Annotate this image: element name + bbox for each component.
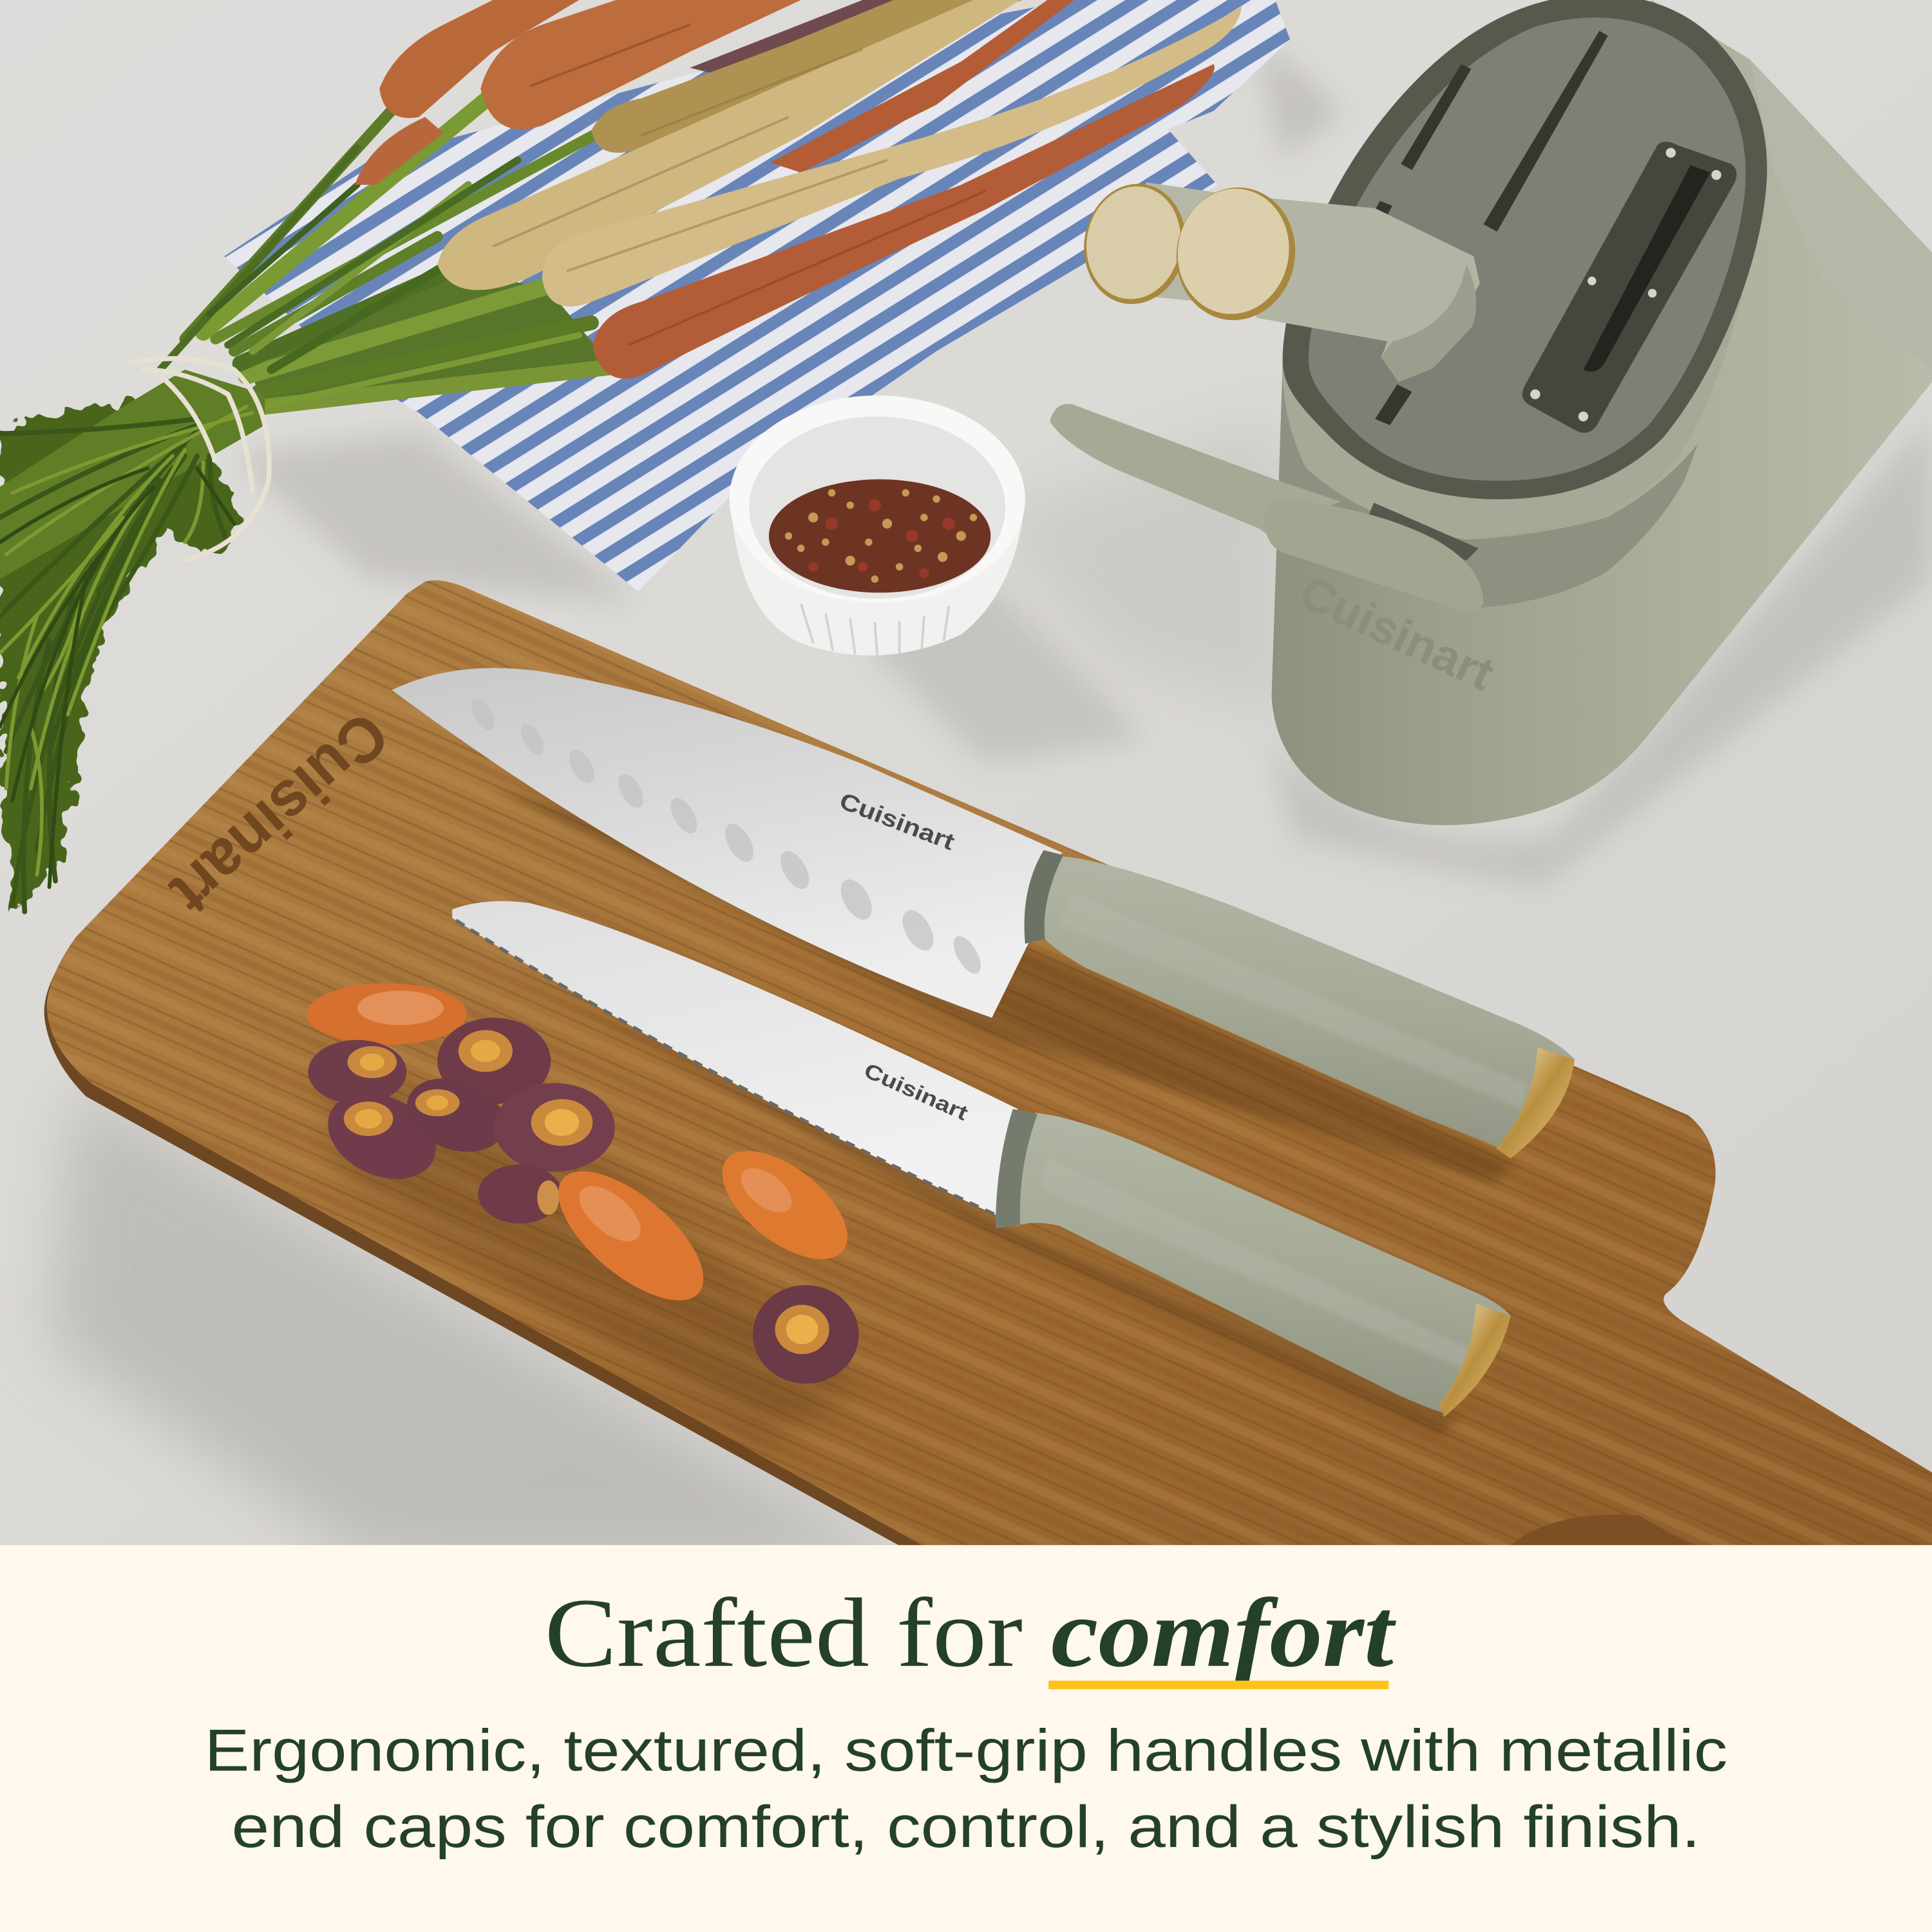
body line one: Ergonomic, textured, soft-grip handles with metallic (205, 1718, 1727, 1783)
shadows on counter (50, 37, 1343, 1565)
slot short (1401, 64, 1471, 170)
red pepper flakes (769, 479, 990, 592)
knife shadow (493, 788, 1515, 1183)
purple slice 7 (753, 1285, 859, 1384)
orange slice 2 (538, 1149, 724, 1323)
collar (996, 1109, 1037, 1229)
under-shoulder shadow (1279, 419, 1698, 609)
board shadow of slices (320, 1059, 862, 1442)
carrot: thin orange (770, 0, 1074, 173)
slot bottom (1375, 384, 1412, 425)
blade logo: Cuisinart (860, 1059, 972, 1125)
wood grain (47, 580, 1932, 1546)
ramekin shadow (862, 579, 1146, 764)
block shadow (1269, 419, 1932, 887)
carrot: white front (542, 6, 1242, 307)
board handle hole (1510, 1515, 1694, 1546)
carrot: purple behind (690, 0, 986, 80)
stored knife handles (1075, 176, 1480, 382)
knife shadow (518, 973, 1460, 1435)
twine tie (129, 359, 269, 561)
slot small (1370, 201, 1392, 224)
heading: Crafted for (545, 1579, 1023, 1688)
orange slice 3 (704, 1130, 866, 1280)
handle highlight (1059, 893, 1528, 1109)
carrot greens fronds (0, 370, 265, 912)
santoku knife (392, 668, 1575, 1183)
blade dimples (467, 696, 986, 978)
caption panel (0, 1545, 1932, 1932)
rear gold cap (1075, 176, 1195, 312)
block top dark rim (1283, 0, 1767, 499)
handle highlight (1041, 1158, 1472, 1370)
board engraved logo: Cuisinart (157, 698, 402, 929)
striped towel (224, 0, 1290, 591)
yellow underline (1048, 1681, 1388, 1689)
heading emphasis: comfort (1051, 1579, 1397, 1688)
stem bundle to tie (0, 370, 265, 579)
blade logo: Cuisinart (836, 787, 958, 855)
ramekin body (731, 499, 1025, 656)
slot long (1484, 31, 1608, 232)
carrot: orange front (592, 64, 1215, 379)
front handle (1232, 194, 1480, 382)
collar (1025, 850, 1063, 944)
orange slice top (307, 983, 467, 1045)
handle (1045, 857, 1575, 1152)
purple slice 1 (308, 1040, 406, 1104)
handle (1016, 1113, 1511, 1414)
board edge (44, 589, 1932, 1553)
board top (47, 580, 1932, 1546)
carrot texture lines (493, 24, 986, 345)
block body (1271, 0, 1932, 825)
carrot: large orange top (480, 0, 801, 129)
red pepper ramekin (730, 395, 1146, 764)
rear handle (1140, 182, 1269, 308)
fronds mass (0, 401, 236, 912)
purple slice 6 (478, 1164, 562, 1224)
carrot: white middle (437, 0, 1020, 290)
purple slice 4 (397, 1065, 515, 1165)
serrated knife (452, 901, 1511, 1435)
purple slice 3 (314, 1076, 450, 1196)
carrot: top left orange (379, 0, 579, 118)
block top face (1309, 17, 1746, 481)
handle base (1381, 265, 1476, 382)
end cap (1496, 1047, 1575, 1158)
serrated edge (456, 920, 996, 1215)
knife block (1050, 0, 1932, 887)
block upper facet (1750, 59, 1932, 370)
front gold cap (1166, 178, 1305, 330)
carrots bunch (160, 0, 1242, 413)
ramekin rim (730, 395, 1025, 603)
block embossed logo: Cuisinart (1292, 566, 1502, 701)
carrot: yellow top (591, 0, 1023, 153)
cutting board (44, 580, 1932, 1553)
shoulder light (1283, 176, 1767, 540)
carrot stems (160, 96, 610, 413)
purple slice 5 (494, 1083, 615, 1172)
body line two: end caps for comfort, control, and a stylish finish. (232, 1794, 1700, 1860)
panel background (0, 1545, 1932, 1932)
carrot: small left orange (355, 117, 444, 185)
carrot slices (307, 983, 866, 1442)
purple slice 2 (437, 1018, 551, 1104)
sharpener plate (1522, 142, 1737, 433)
kitchen shears (1050, 404, 1484, 611)
end cap (1439, 1303, 1511, 1417)
blade (392, 668, 1062, 1018)
blade (452, 901, 1018, 1215)
ramekin flutes (801, 604, 949, 656)
ramekin interior (749, 417, 1005, 599)
